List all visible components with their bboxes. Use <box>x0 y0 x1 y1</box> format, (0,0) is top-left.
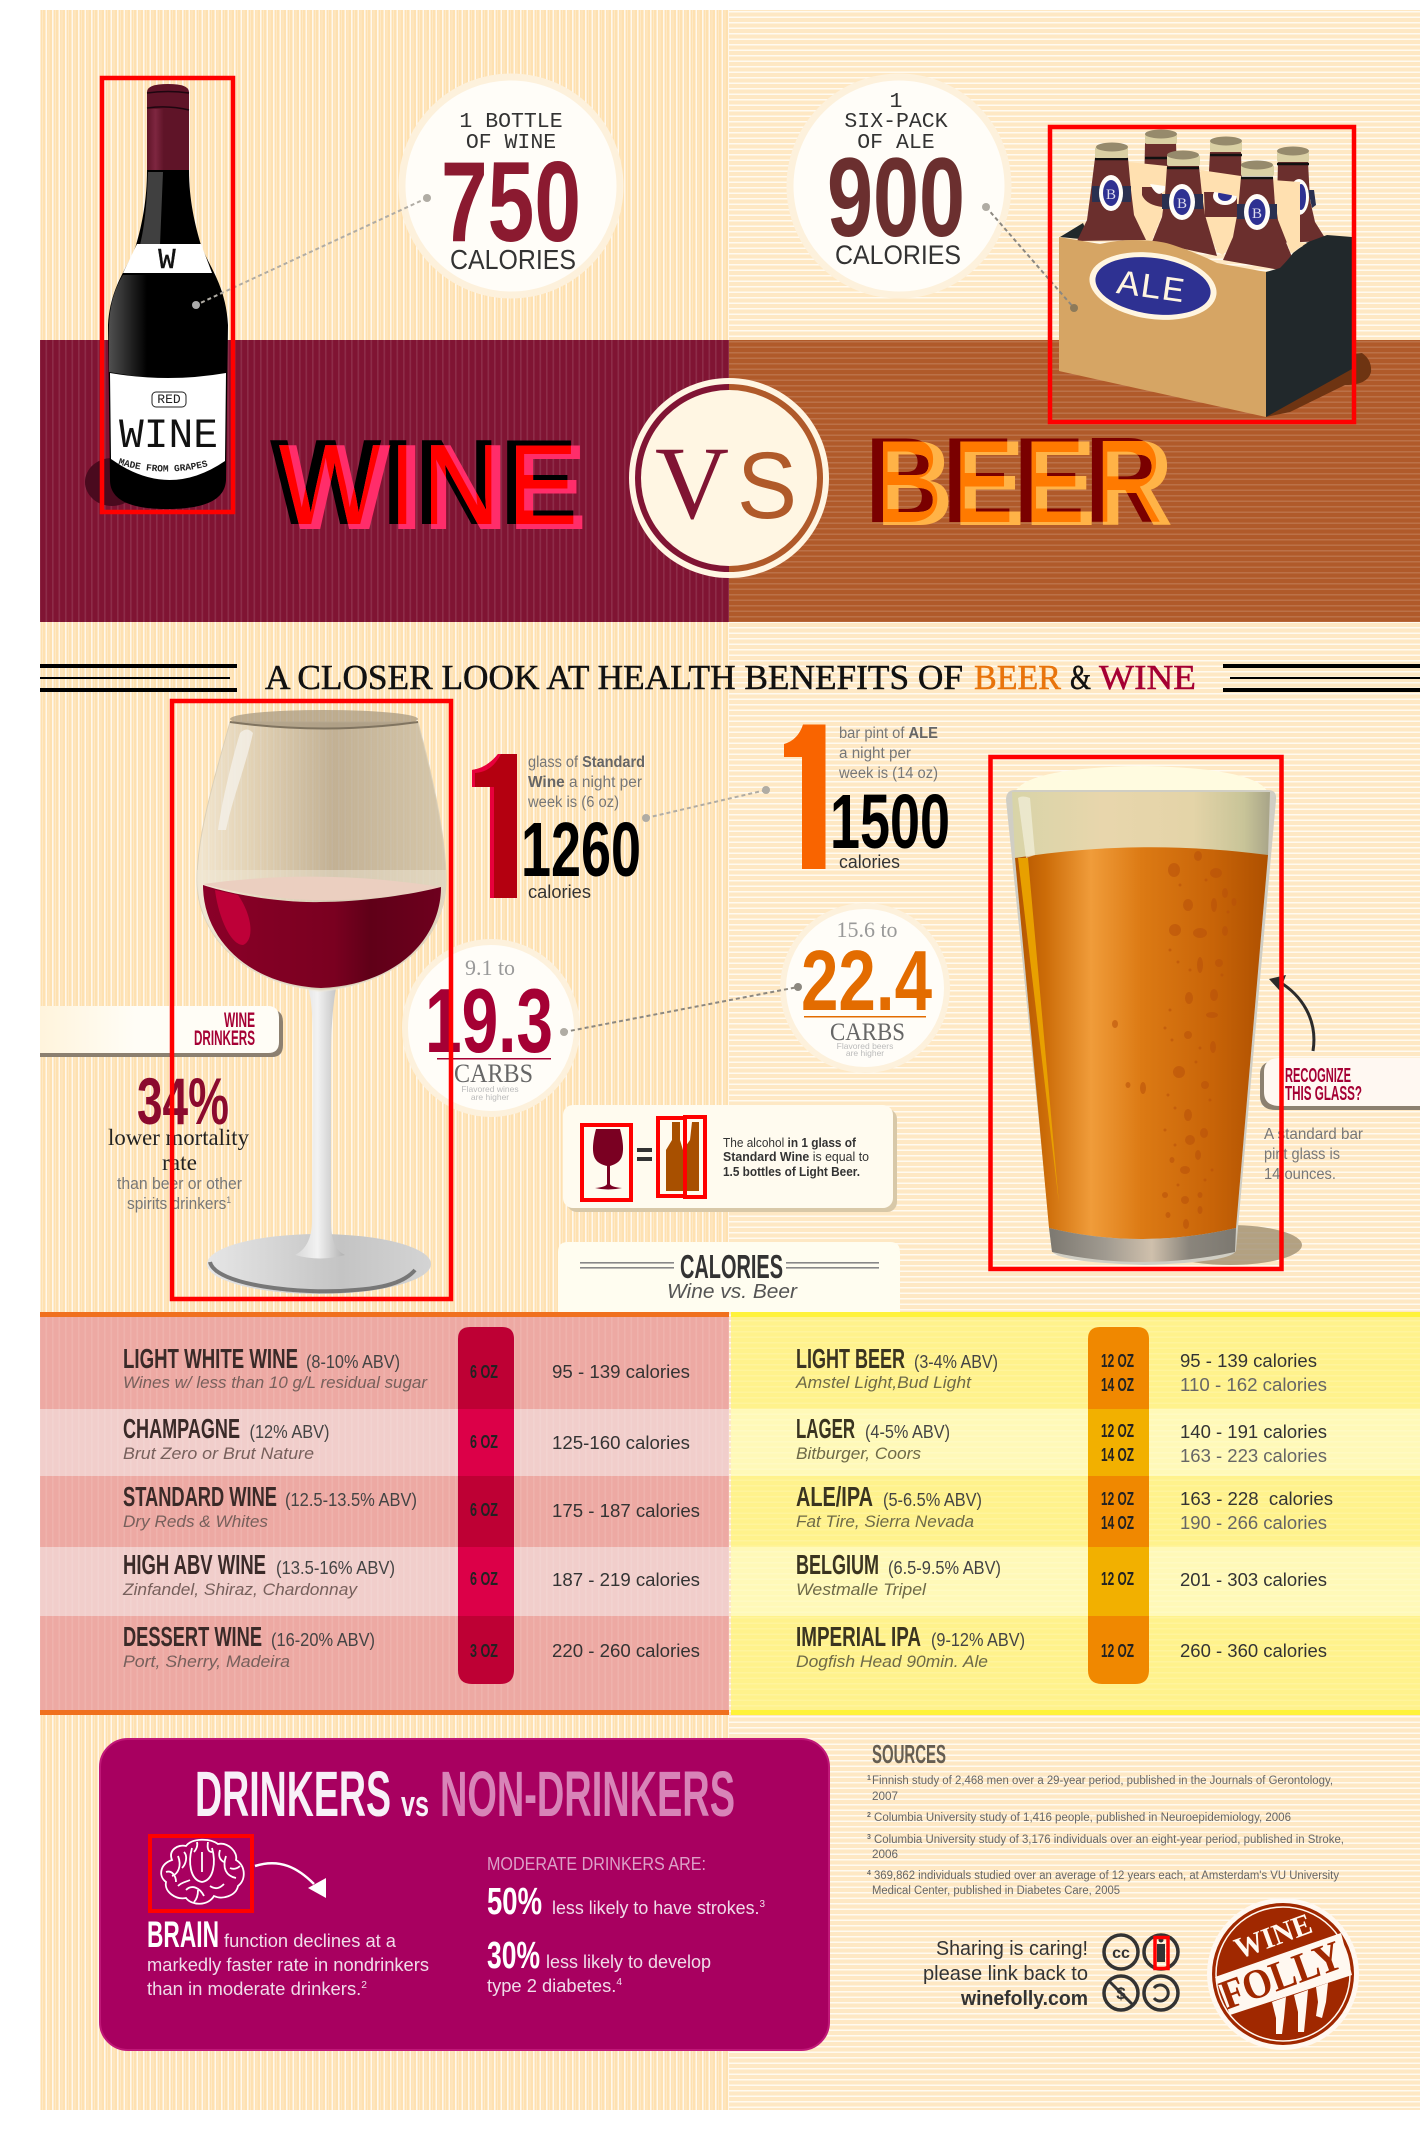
sources: Columbia University study of 1,416 people, published in Neuroepidemiology, 2006 <box>874 1812 1291 1824</box>
row: champagne: (12% ABV) <box>250 1422 330 1442</box>
row: standard wine: 6 OZ <box>470 1499 498 1520</box>
callout: beer carbs <box>783 906 947 1070</box>
tab: wine drinkers <box>40 1006 283 1057</box>
row: high abv wine: 6 OZ <box>470 1568 498 1589</box>
brain text: BRAIN <box>147 1914 219 1955</box>
equals sign <box>637 1148 652 1161</box>
tab: wine drinkers: DRINKERS <box>194 1027 255 1050</box>
row: imperial ipa: IMPERIAL IPA <box>796 1621 921 1652</box>
row: imperial ipa: Dogfish Head 90min. Ale <box>796 1653 988 1671</box>
row: champagne <box>123 1413 690 1463</box>
connector: bottle to wine calories <box>192 194 431 309</box>
row: light beer: 12 OZ <box>1101 1350 1134 1371</box>
brain text: markedly faster rate in nondrinkers <box>147 1955 429 1975</box>
sources: 1 <box>867 1775 871 1782</box>
numeral 1: 1 <box>466 718 524 941</box>
moderate drinkers stats <box>487 1854 765 1996</box>
moderate drinkers stats: type 2 diabetes. <box>487 1976 614 1996</box>
brain text: than in moderate drinkers. <box>147 1979 356 1999</box>
ALE oval <box>1085 244 1221 328</box>
icon: pint of beer <box>1006 766 1302 1265</box>
row: light white wine: (8-10% ABV) <box>306 1352 400 1372</box>
section heading: health benefits: BEER <box>974 658 1062 697</box>
brain text <box>147 1914 429 1999</box>
text: sharing is caring: please link back to <box>923 1963 1088 1985</box>
stat: 1 glass of wine 1260 calories: 1260 <box>521 807 641 893</box>
row: imperial ipa: 260 - 360 calories <box>1180 1641 1327 1661</box>
callout: wine carbs: are higher <box>471 1092 509 1102</box>
stat: 1 glass of wine 1260 calories: week is (6 oz) <box>527 794 619 811</box>
sources: Medical Center, published in Diabetes Care, 2005 <box>872 1885 1120 1897</box>
brain text: 2 <box>361 1980 367 1991</box>
sources: 4 <box>867 1870 871 1877</box>
row: lager: 140 - 191 calories <box>1180 1422 1327 1442</box>
row: standard wine: STANDARD WINE <box>123 1481 277 1512</box>
row: light beer: Amstel Light,Bud Light <box>795 1374 972 1392</box>
section heading: health benefits <box>40 658 1420 697</box>
stat: 34% lower mortality: 1 <box>226 1195 231 1205</box>
icon: wine bottle: W <box>158 244 176 277</box>
icon: wine bottle: WINE <box>119 412 218 460</box>
tab: calories heading: Wine vs. Beer <box>667 1281 798 1303</box>
title badge: VS <box>629 378 829 578</box>
sources: 2007 <box>872 1791 898 1803</box>
callout: wine carbs: 9.1 to <box>465 955 515 980</box>
row: ale/ipa: ALE/IPA <box>796 1481 873 1512</box>
row: dessert wine: 3 OZ <box>470 1640 498 1661</box>
row: dessert wine: Port, Sherry, Madeira <box>123 1653 290 1671</box>
stat: 1 pint of ale 1500 calories: week is (14 oz) <box>838 765 938 782</box>
row: high abv wine <box>122 1549 700 1599</box>
title word: BEER: BEER <box>865 412 1162 548</box>
row: lager: Bitburger, Coors <box>796 1445 921 1463</box>
serving size pill <box>1088 1327 1149 1684</box>
tab: calories heading <box>558 1242 900 1312</box>
row: standard wine <box>123 1481 700 1531</box>
panel: alcohol equivalence <box>563 1105 897 1212</box>
row: champagne: CHAMPAGNE <box>123 1413 240 1444</box>
icon: beer bottles <box>666 1122 699 1191</box>
stat: 1 glass of wine 1260 calories: glass of Standard <box>528 754 645 771</box>
icon: wine bottle: MADE FROM GRAPES <box>118 458 208 472</box>
icon: brain <box>161 1840 244 1904</box>
front bottles: B <box>1252 206 1262 222</box>
callout: beer carbs: are higher <box>846 1048 884 1058</box>
row: belgium <box>796 1549 1327 1599</box>
brain text: function declines at a <box>224 1931 397 1951</box>
title word: BEER <box>872 438 1171 525</box>
title word: WINE: WINE <box>270 414 578 550</box>
row: light white wine: LIGHT WHITE WINE <box>123 1343 298 1374</box>
stat: 1 pint of ale 1500 calories: 1500 <box>830 779 950 865</box>
row: high abv wine: (13.5-16% ABV) <box>276 1558 395 1578</box>
carton <box>1059 237 1352 417</box>
callout: 1 bottle of wine 750 calories <box>402 77 620 295</box>
row: lager: 163 - 223 calories <box>1180 1446 1327 1466</box>
highlight boxes <box>102 78 1354 1968</box>
stat: 1 pint of ale 1500 calories <box>784 724 948 869</box>
row: lager: (4-5% ABV) <box>865 1422 950 1442</box>
callout: wine carbs: Flavored wines <box>461 1084 519 1094</box>
heading: vs <box>401 1783 429 1824</box>
tab: calories heading: CALORIES <box>680 1248 783 1285</box>
row: ale/ipa: 12 OZ <box>1101 1488 1134 1509</box>
row: dessert wine: DESSERT WINE <box>123 1621 262 1652</box>
sources: 3 <box>867 1834 871 1841</box>
stat: 1 glass of wine 1260 calories <box>472 754 644 898</box>
stat: 34% lower mortality: lower mortality <box>108 1125 249 1150</box>
carton dark inner edge <box>1060 223 1352 250</box>
row: light beer: (3-4% ABV) <box>914 1352 998 1372</box>
row: belgium: 201 - 303 calories <box>1180 1570 1327 1590</box>
row: lager <box>796 1413 1327 1466</box>
stat: 34% lower mortality: spirits drinkers <box>127 1195 233 1213</box>
icon: wine glass <box>197 710 446 1294</box>
callout: six-pack of ale 900 calories: 900 <box>827 135 965 260</box>
callout: 1 bottle of wine 750 calories: OF WINE <box>466 131 556 155</box>
logo: wine folly: FOLLY <box>1214 1933 1348 2019</box>
row: champagne: Brut Zero or Brut Nature <box>123 1445 314 1463</box>
cardboard dividers <box>1128 162 1307 255</box>
stat: 34% lower mortality: rate <box>162 1150 197 1175</box>
text: sharing is caring: winefolly.com <box>960 1988 1088 2010</box>
stat: 1 pint of ale 1500 calories: 1 <box>778 689 832 912</box>
sources: Columbia University study of 3,176 individuals over an eight-year period, published in Stroke, <box>874 1834 1344 1846</box>
row: dessert wine: (16-20% ABV) <box>271 1630 375 1650</box>
back bottle lower pieces <box>1142 170 1241 217</box>
row: lager: 12 OZ <box>1101 1420 1134 1441</box>
callout: six-pack of ale 900 calories: 1 <box>890 90 902 114</box>
title badge: VS: S <box>737 433 797 539</box>
front bottles: B <box>1106 187 1116 203</box>
callout: 1 bottle of wine 750 calories: 1 BOTTLE <box>459 110 563 134</box>
connector: beer calories to six-pack <box>982 203 1078 312</box>
heading: NON-DRINKERS <box>440 1758 735 1830</box>
row: high abv wine: HIGH ABV WINE <box>123 1549 266 1580</box>
section heading: health benefits: & <box>1070 658 1091 697</box>
section heading: health benefits: A CLOSER LOOK AT HEALTH BENEFITS OF <box>265 658 963 697</box>
table: wine calories <box>40 1312 729 1715</box>
callout: wine carbs: 19.3 <box>425 971 553 1072</box>
row: light white wine: Wines w/ less than 10 g/L residual sugar <box>123 1374 429 1392</box>
text: standard bar pint: pint glass is <box>1264 1146 1340 1163</box>
section heading: health benefits: WINE <box>1099 658 1196 697</box>
title word: WINE: WINE <box>279 419 587 555</box>
moderate drinkers stats: less likely to develop <box>546 1952 711 1972</box>
icon: small wine glass <box>593 1129 623 1190</box>
stat: 34% lower mortality: than beer or other <box>117 1175 242 1193</box>
icons: creative commons: cc <box>1112 1945 1130 1962</box>
arrow: recognize this glass <box>1269 975 1314 1051</box>
row: light beer <box>795 1343 1327 1395</box>
callout: beer carbs: CARBS <box>830 1019 905 1046</box>
row: belgium: Westmalle Tripel <box>796 1581 927 1599</box>
front bottles: B <box>1177 196 1187 212</box>
row: ale/ipa: (5-6.5% ABV) <box>883 1490 982 1510</box>
row: dessert wine: 220 - 260 calories <box>552 1641 700 1661</box>
row: imperial ipa: (9-12% ABV) <box>931 1630 1025 1650</box>
callout: wine carbs: CARBS <box>454 1059 533 1088</box>
title band <box>40 340 1420 622</box>
row: light beer: 110 - 162 calories <box>1180 1375 1327 1395</box>
tab: recognize this glass <box>1260 1058 1420 1110</box>
row: champagne: 6 OZ <box>470 1431 498 1452</box>
callout: beer carbs: 15.6 to <box>836 917 898 942</box>
sources: SOURCES <box>872 1739 946 1769</box>
row: imperial ipa <box>796 1621 1327 1671</box>
front bottles <box>1077 142 1292 270</box>
text: standard bar pint: A standard bar <box>1264 1126 1364 1143</box>
stat: 1 glass of wine 1260 calories: calories <box>528 882 591 902</box>
stat: 1 pint of ale 1500 calories: a night per <box>839 745 911 762</box>
back bottles <box>1144 130 1327 243</box>
icon: wine bottle <box>85 84 228 509</box>
moderate drinkers stats: 30% <box>487 1935 540 1977</box>
sources: Finnish study of 2,468 men over a 29-year period, published in the Journals of Gerontology, <box>872 1775 1333 1787</box>
row: standard wine: 175 - 187 calories <box>552 1501 700 1521</box>
moderate drinkers stats: less likely to have strokes. <box>552 1898 761 1918</box>
callout: beer carbs: Flavored beers <box>837 1041 893 1051</box>
moderate drinkers stats: 4 <box>616 1977 622 1988</box>
row: high abv wine: Zinfandel, Shiraz, Chardonnay <box>122 1581 359 1599</box>
equivalence text: The alcohol in 1 glass of <box>723 1136 857 1150</box>
row: light white wine <box>123 1343 690 1392</box>
numeral 1 <box>784 724 826 869</box>
ALE oval: ALE <box>1114 264 1187 313</box>
stat: 1 glass of wine 1260 calories: Wine a night per <box>528 774 642 791</box>
callout: six-pack of ale 900 calories <box>790 77 1008 295</box>
connector: 1260 to 1500 <box>642 786 770 822</box>
title word: WINE <box>270 440 582 529</box>
icons: creative commons: $ <box>1116 1984 1126 2003</box>
callout: wine carbs <box>405 942 577 1114</box>
sources: 369,862 individuals studied over an average of 12 years each, at Amsterdam's VU University <box>874 1870 1339 1882</box>
row: belgium: 12 OZ <box>1101 1568 1134 1589</box>
logo: wine folly <box>1207 1898 1359 2050</box>
row: light beer: 95 - 139 calories <box>1180 1351 1317 1371</box>
stat: 34% lower mortality: 34% <box>137 1064 229 1138</box>
logo: wine folly: WINE <box>1230 1907 1316 1966</box>
title badge: VS: V <box>655 426 729 541</box>
row: standard wine: (12.5-13.5% ABV) <box>285 1490 417 1510</box>
row: ale/ipa: Fat Tire, Sierra Nevada <box>796 1513 974 1531</box>
heading: DRINKERS <box>195 1758 391 1830</box>
text: standard bar pint: 14 ounces. <box>1264 1166 1336 1183</box>
title word: BEER: BEER <box>876 415 1173 551</box>
row: standard wine: Dry Reds & Whites <box>123 1513 268 1531</box>
row: light beer: LIGHT BEER <box>796 1343 905 1374</box>
icon: wine bottle: RED <box>157 392 181 407</box>
connector: wine carbs to beer carbs <box>560 983 802 1036</box>
panel: drinkers vs non-drinkers <box>100 1739 829 2050</box>
icons: creative commons <box>1104 1935 1178 2010</box>
moderate drinkers stats: 50% <box>487 1881 542 1923</box>
arrow: brain <box>255 1863 326 1898</box>
row: ale/ipa: 163 - 228 calories <box>1180 1489 1333 1509</box>
moderate drinkers stats: 3 <box>759 1899 765 1910</box>
panel: alcohol equivalence: Standard Wine is equal to <box>723 1150 869 1164</box>
numeral 1 <box>472 754 517 898</box>
callout: 1 bottle of wine 750 calories: 750 <box>441 139 581 266</box>
row: ale/ipa <box>796 1481 1333 1533</box>
heading <box>195 1758 735 1830</box>
callout: beer carbs: 22.4 <box>801 934 932 1029</box>
row: ale/ipa: 14 OZ <box>1101 1512 1134 1533</box>
sources: 2 <box>867 1812 871 1819</box>
row: light white wine: 95 - 139 calories <box>552 1362 690 1382</box>
stat: 1 pint of ale 1500 calories: bar pint of ALE <box>839 725 938 742</box>
tab: recognize this glass: THIS GLASS? <box>1285 1083 1362 1105</box>
row: light white wine: 6 OZ <box>470 1361 498 1382</box>
bubbles <box>1112 851 1236 1229</box>
row: lager: LAGER <box>796 1413 855 1444</box>
table: beer calories <box>731 1312 1420 1715</box>
icon: six-pack of ale <box>1059 130 1371 417</box>
title word: WINE: WINE <box>279 419 587 555</box>
row: belgium: (6.5-9.5% ABV) <box>888 1558 1001 1578</box>
row: light beer: 14 OZ <box>1101 1374 1134 1395</box>
callout: six-pack of ale 900 calories: CALORIES <box>835 240 961 270</box>
text: sharing is caring <box>923 1938 1088 2010</box>
serving size pill <box>458 1327 514 1684</box>
tab: recognize this glass: RECOGNIZE <box>1285 1065 1351 1087</box>
stat: 1 pint of ale 1500 calories: calories <box>839 852 900 872</box>
tab: wine drinkers: WINE <box>224 1009 255 1032</box>
row: champagne: 125-160 calories <box>552 1433 690 1453</box>
callout: 1 bottle of wine 750 calories: CALORIES <box>450 244 576 275</box>
row: imperial ipa: 12 OZ <box>1101 1640 1134 1661</box>
panel: alcohol equivalence: 1.5 bottles of Light Beer. <box>723 1165 860 1179</box>
text: standard bar pint <box>1264 1126 1364 1183</box>
callout: six-pack of ale 900 calories: SIX-PACK <box>844 110 948 134</box>
title word: BEER: BEER <box>876 415 1173 551</box>
row: ale/ipa: 190 - 266 calories <box>1180 1513 1327 1533</box>
stat: 34% lower mortality <box>108 1064 249 1213</box>
moderate drinkers stats: MODERATE DRINKERS ARE: <box>487 1854 706 1874</box>
callout: six-pack of ale 900 calories: OF ALE <box>857 131 935 155</box>
row: high abv wine: 187 - 219 calories <box>552 1570 700 1590</box>
sources <box>867 1739 1344 1897</box>
row: dessert wine <box>123 1621 700 1671</box>
sources: 2006 <box>872 1849 898 1861</box>
text: sharing is caring: Sharing is caring! <box>936 1938 1088 1960</box>
row: belgium: BELGIUM <box>796 1549 879 1580</box>
row: lager: 14 OZ <box>1101 1444 1134 1465</box>
